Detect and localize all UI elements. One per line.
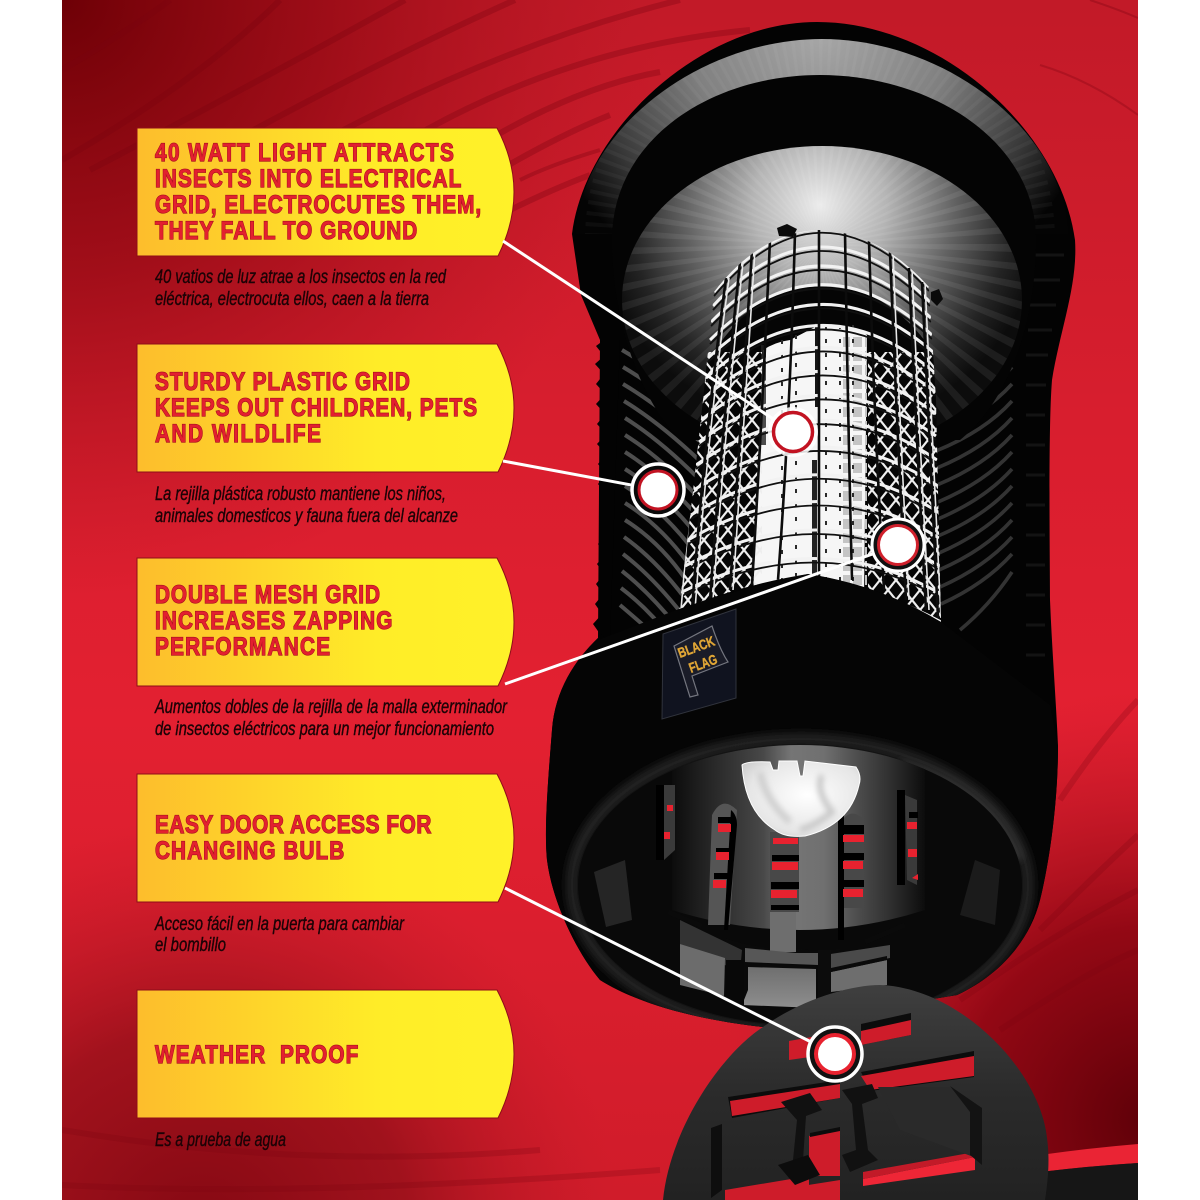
body silhouette bbox=[546, 22, 1075, 1027]
slots bbox=[861, 1013, 911, 1045]
central cylinder bbox=[672, 740, 925, 930]
callout banner 2: AND WILDLIFE bbox=[155, 419, 321, 447]
spanish text 5: Es a prueba de agua bbox=[155, 1130, 286, 1151]
bulb bbox=[742, 761, 860, 836]
marker 4 bbox=[808, 1027, 862, 1081]
ring rays bbox=[586, 172, 1054, 234]
spanish text 1 bbox=[155, 267, 447, 310]
spanish text 4 bbox=[154, 914, 405, 956]
callout banner 3 bbox=[137, 558, 514, 686]
callout banner 3: DOUBLE MESH GRID bbox=[155, 580, 380, 608]
interior lower blocks bbox=[680, 920, 742, 966]
ribs right bbox=[935, 350, 1012, 630]
collar top bbox=[546, 574, 1058, 1027]
spanish text 2: La rejilla plástica robusto mantiene los niños, bbox=[155, 484, 446, 505]
reflector rays bbox=[710, 135, 930, 355]
ribs left bbox=[620, 350, 705, 640]
callout banner 1: GRID, ELECTROCUTES THEM, bbox=[155, 190, 481, 218]
spanish text 3: Aumentos dobles de la rejilla de la malla exterminador bbox=[154, 697, 508, 718]
product: bug zapper body bbox=[546, 22, 1075, 1040]
leader line 1 bbox=[503, 241, 793, 432]
side panels bbox=[594, 860, 632, 927]
leader line 3 bbox=[505, 545, 898, 684]
side lattice bbox=[679, 352, 762, 609]
grid clips bbox=[777, 224, 943, 306]
marker 3 bbox=[872, 519, 924, 571]
dark ribs of mesh bbox=[679, 233, 941, 626]
bulb slots bbox=[656, 785, 917, 940]
badge: Black Flag bbox=[662, 609, 736, 719]
marker 1 bbox=[768, 407, 818, 457]
ledge arcs bbox=[668, 912, 905, 953]
leader line 4 bbox=[505, 888, 835, 1054]
callout banner 4: EASY DOOR ACCESS FOR bbox=[155, 810, 432, 838]
callout banner 3: PERFORMANCE bbox=[155, 632, 330, 660]
marker 2 bbox=[632, 464, 684, 516]
spanish text 3 bbox=[154, 697, 508, 740]
ribs far right steps bbox=[1026, 205, 1064, 655]
spanish text 4: Acceso fácil en la puerta para cambiar bbox=[154, 914, 405, 935]
core dots bbox=[782, 325, 853, 600]
left serrated edge bbox=[593, 340, 620, 640]
callout banner 5: WEATHER PROOF bbox=[155, 1040, 358, 1068]
callout banner 2: KEEPS OUT CHILDREN, PETS bbox=[155, 393, 477, 421]
callout banner 1: THEY FALL TO GROUND bbox=[155, 216, 417, 244]
latches bbox=[781, 1093, 822, 1160]
collar inner rim highlight bbox=[572, 739, 1028, 1031]
black gaps bbox=[714, 812, 918, 910]
badge: Black Flag: BLACK bbox=[676, 633, 717, 661]
spanish text 1: 40 vatios de luz atrae a los insectos en la red bbox=[155, 267, 447, 288]
light ribs of mesh bbox=[679, 229, 941, 622]
callout banner 3: INCREASES ZAPPING bbox=[155, 606, 392, 634]
vertical mesh wires bbox=[692, 230, 938, 618]
spanish text 2: animales domesticos y fauna fuera del alcanze bbox=[155, 506, 458, 527]
callout banner 4: CHANGING BULB bbox=[155, 836, 344, 864]
center column bbox=[770, 912, 796, 952]
callout banner 2: STURDY PLASTIC GRID bbox=[155, 367, 410, 395]
outer gray ring bbox=[576, 39, 1068, 234]
callout banner 1: INSECTS INTO ELECTRICAL bbox=[155, 164, 461, 192]
leader line 2 bbox=[503, 461, 658, 490]
wire grid bbox=[679, 230, 941, 622]
red stripes bbox=[664, 805, 918, 898]
spanish text 2 bbox=[155, 484, 458, 527]
callout banner 5 bbox=[137, 990, 514, 1118]
callout banner 1 bbox=[137, 128, 514, 256]
base plate bbox=[663, 985, 1048, 1200]
spanish text 1: eléctrica, electrocuta ellos, caen a la tierra bbox=[155, 289, 429, 310]
spanish text 4: el bombillo bbox=[155, 935, 226, 956]
interior opening bbox=[578, 745, 1022, 1024]
reflector cone bbox=[622, 146, 1022, 454]
right well bbox=[878, 1087, 972, 1156]
left well wall bbox=[711, 1124, 722, 1198]
inner black cup bbox=[612, 75, 1036, 440]
glowing core bbox=[753, 326, 867, 600]
callout banner 1: 40 WATT LIGHT ATTRACTS bbox=[155, 138, 454, 166]
callout banner 4 bbox=[137, 774, 514, 902]
bottom right red band bbox=[1040, 1144, 1138, 1200]
badge: Black Flag: FLAG bbox=[687, 651, 719, 676]
spanish text 3: de insectos eléctricos para un mejor funcionamiento bbox=[155, 719, 494, 740]
callout banner 2 bbox=[137, 344, 514, 472]
